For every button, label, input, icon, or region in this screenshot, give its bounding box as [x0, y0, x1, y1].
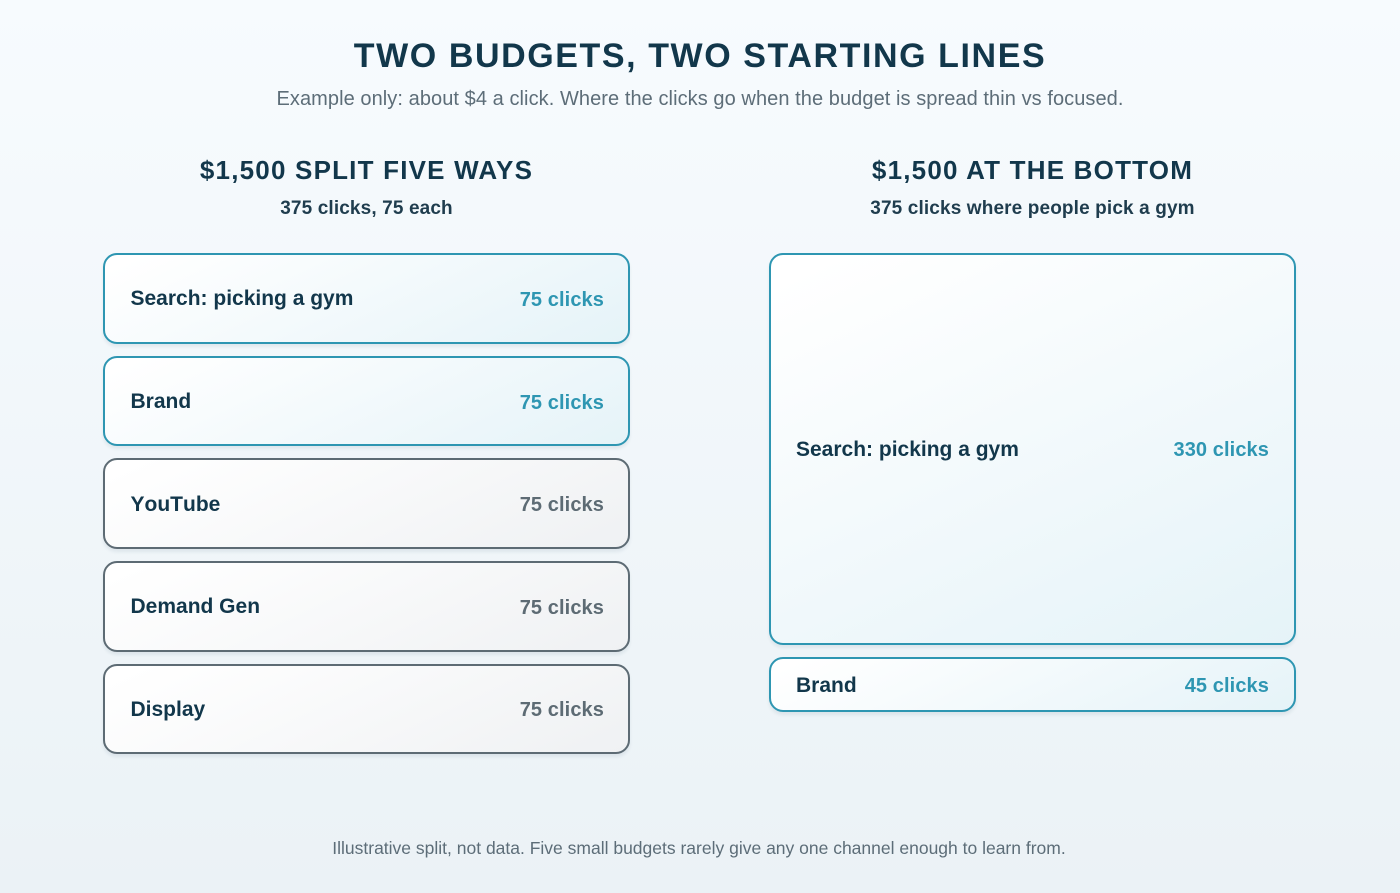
- footnote: Illustrative split, not data. Five small budgets rarely give any one channel enough to learn from.: [332, 838, 1066, 858]
- row: brand: Brand: [130, 390, 191, 413]
- row: search large: [769, 253, 1296, 645]
- row: demand gen: Demand Gen: [130, 594, 260, 618]
- row: brand: [103, 356, 630, 446]
- row: search large: Search: picking a gym: [796, 438, 1019, 461]
- row: search: 75 clicks: [520, 289, 604, 311]
- row: youtube: [103, 458, 630, 549]
- row: display: [103, 664, 630, 754]
- row: youtube: YouTube: [130, 492, 220, 516]
- subheading: 375 clicks where people pick a gym: 375 clicks where people pick a gym: [870, 198, 1195, 219]
- row: display: 75 clicks: [520, 698, 604, 720]
- row: demand gen: 75 clicks: [520, 597, 604, 619]
- row: demand gen: [103, 561, 630, 652]
- title: TWO BUDGETS, TWO STARTING LINES: [354, 37, 1046, 75]
- row: brand: 75 clicks: [520, 392, 604, 414]
- subheading: 375 clicks, 75 each: 375 clicks, 75 each: [280, 198, 453, 219]
- heading: at the bottom: $1,500 AT THE BOTTOM: [872, 155, 1193, 185]
- heading: split five ways: $1,500 SPLIT FIVE WAYS: [200, 155, 533, 185]
- subtitle: Example only: about $4 a click. Where the clicks go when the budget is spread thin vs focused.: [276, 88, 1124, 110]
- row: display: Display: [130, 698, 205, 721]
- row: search: [103, 253, 630, 344]
- row: brand small: [769, 657, 1296, 712]
- row: search: Search: picking a gym: [130, 286, 353, 310]
- row: brand small: 45 clicks: [1185, 675, 1269, 697]
- row: youtube: 75 clicks: [520, 494, 604, 516]
- row: brand small: Brand: [796, 674, 857, 696]
- row: search large: 330 clicks: [1173, 438, 1269, 460]
- panel: at the bottom: [769, 155, 1296, 715]
- panel: split five ways: [103, 155, 630, 757]
